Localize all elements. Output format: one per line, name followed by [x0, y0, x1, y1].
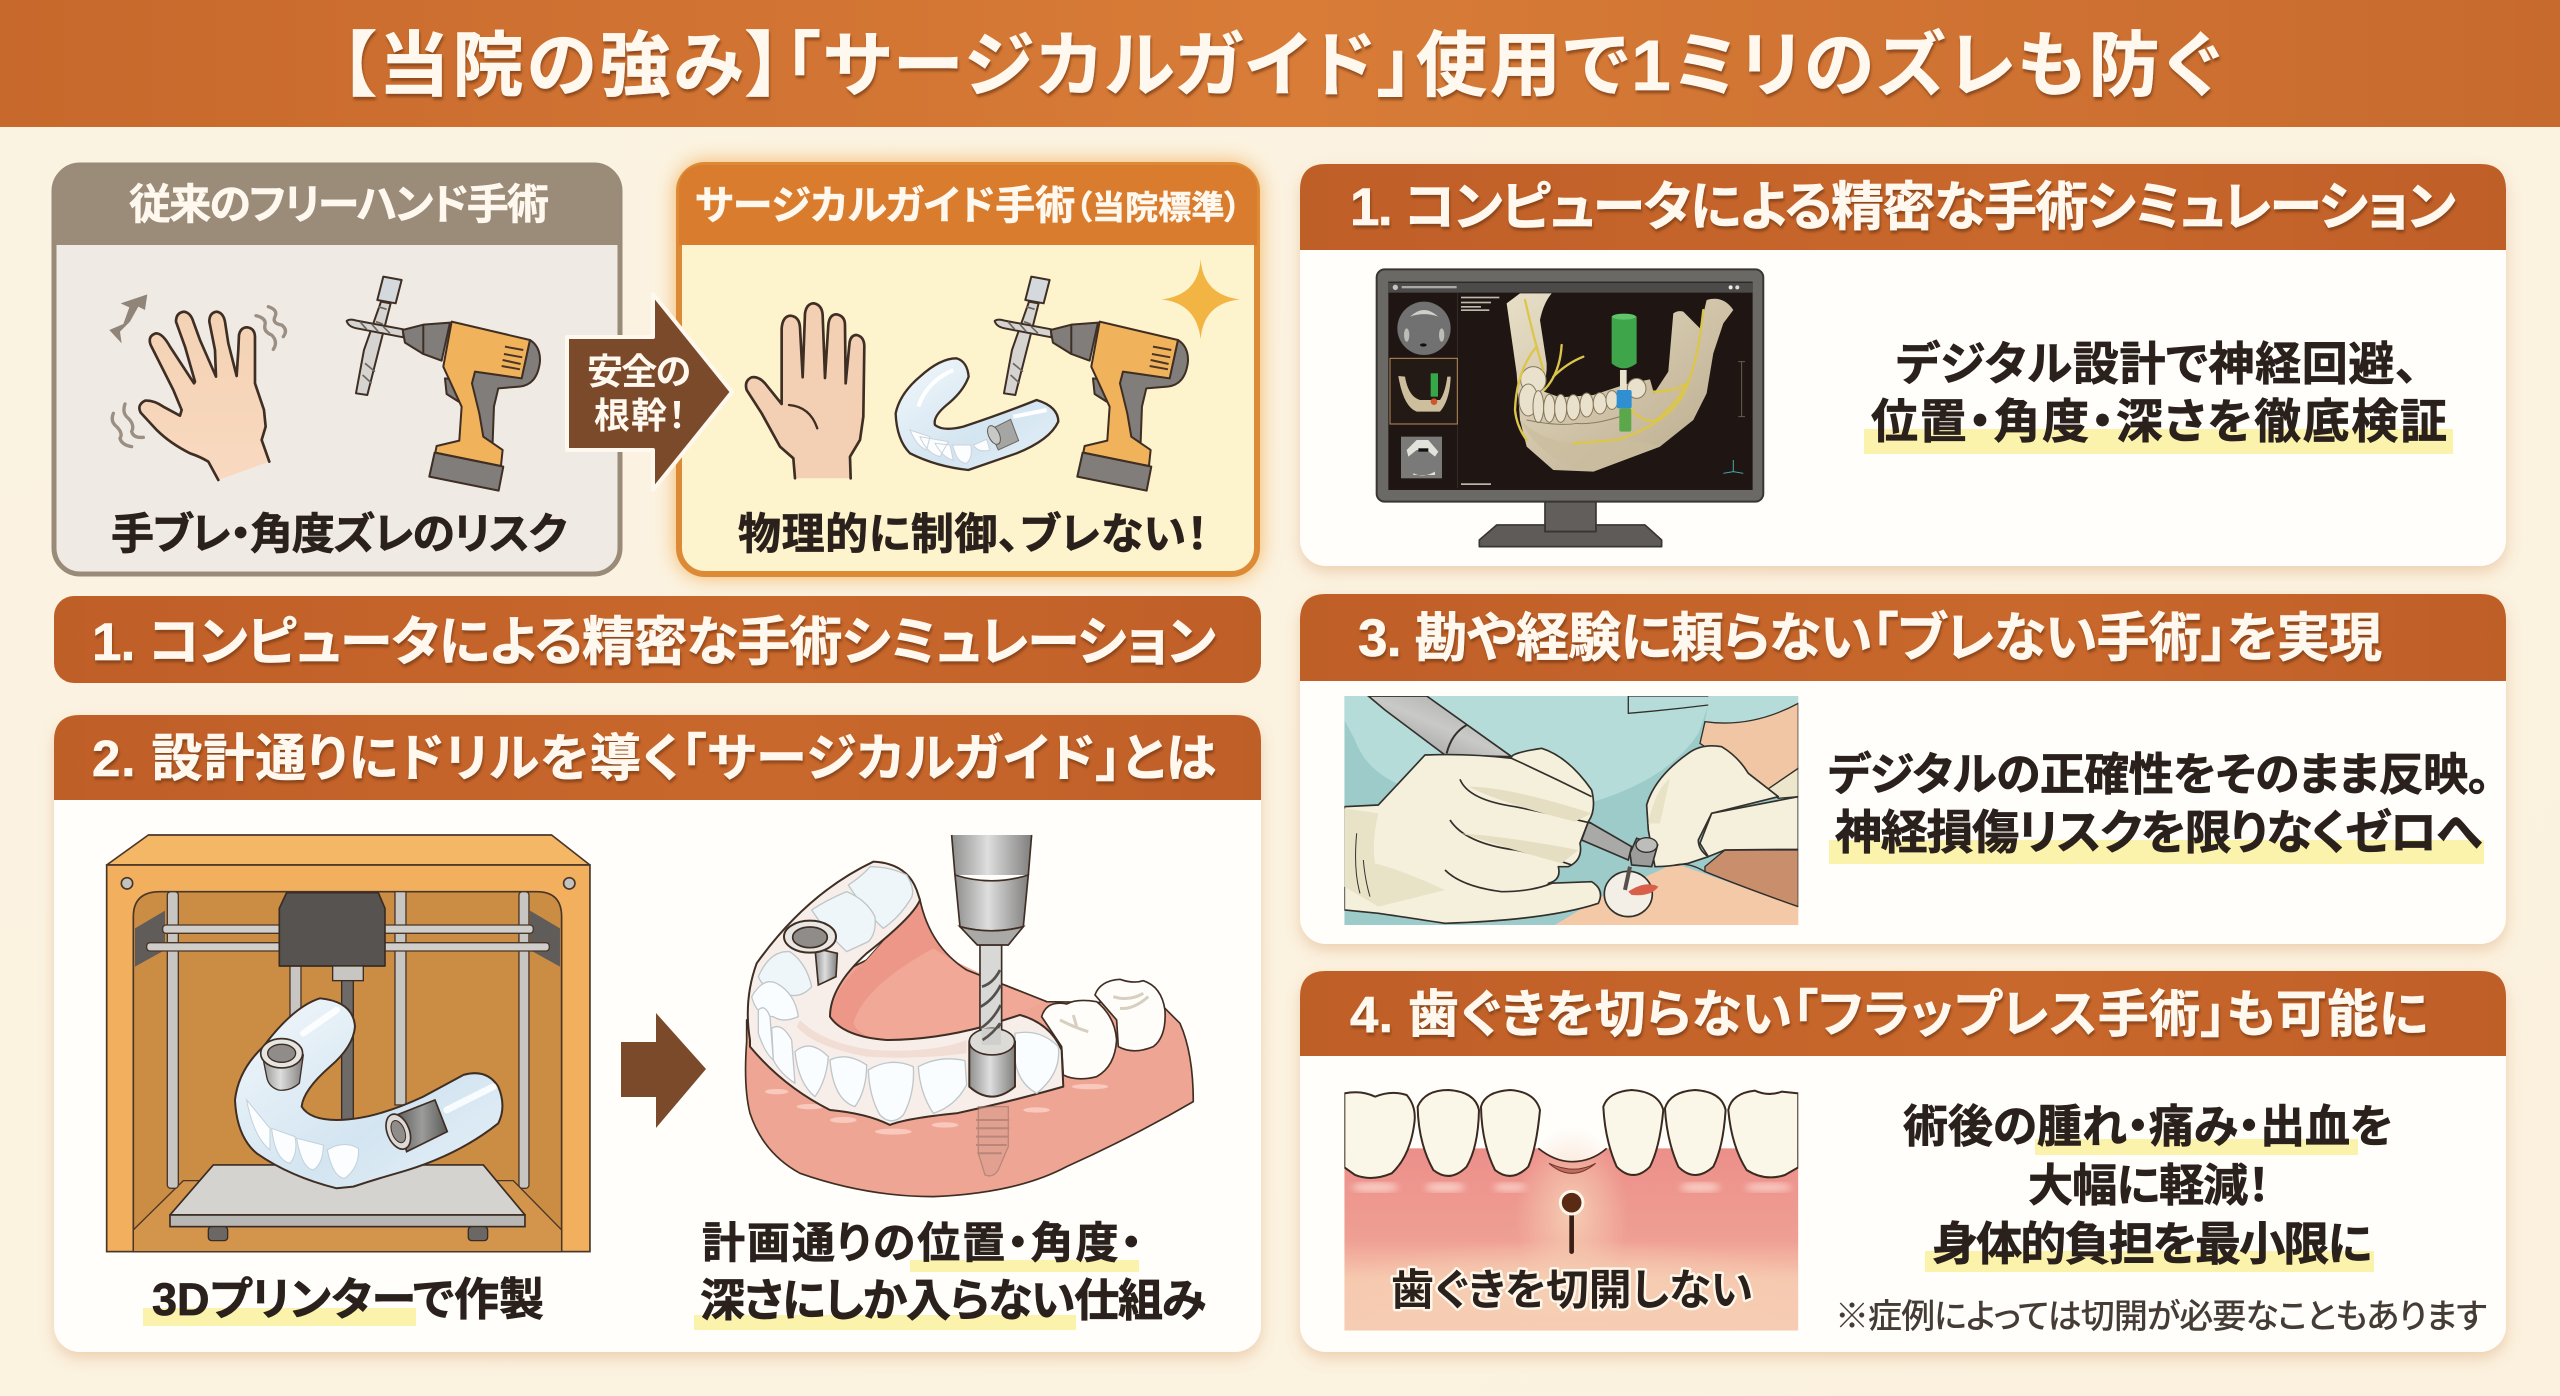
panel header: surgical guide: サージカルガイド手術（当院標準）	[695, 184, 1241, 228]
handpiece	[952, 835, 1032, 875]
guide plate	[748, 862, 1063, 1125]
panel header: simulation	[1300, 164, 2506, 250]
panel header: step 4	[1300, 971, 2506, 1056]
label: precise position, angle, depth	[694, 1220, 1206, 1330]
icon: steady hand	[746, 303, 864, 478]
text: digital design: デジタル設計で神経回避、	[1896, 338, 2418, 390]
panel header: surgical guide	[679, 165, 1257, 245]
panel header: freehand	[54, 165, 620, 245]
panel header: step 3	[1300, 594, 2506, 681]
panel header: step 3: 3. 勘や経験に頼らない「ブレない手術」を実現	[1358, 609, 2382, 668]
drill shaft	[980, 945, 1002, 1048]
icon: monitor with jaw simulation	[1377, 269, 1763, 547]
arrow: printer to mouth	[621, 1013, 706, 1128]
arrow: foundation of safety: 根幹！	[594, 395, 686, 436]
label: physically controlled: 物理的に制御、ブレない！	[738, 511, 1208, 559]
arrow: foundation of safety	[567, 294, 732, 490]
icon: sparkle	[1162, 259, 1240, 339]
text: digital design	[1864, 338, 2453, 454]
panel header: step 2: 2. 設計通りにドリルを導く「サージカルガイド」とは	[92, 730, 1216, 787]
panel header: simulation: 1. コンピュータによる精密な手術シミュレーション	[1350, 178, 2456, 237]
panel: step 3 no-shake surgery	[1300, 594, 2506, 944]
panel: step 4 flapless surgery	[1300, 971, 2506, 1353]
text: digital accuracy: デジタルの正確性をそのまま反映。	[1828, 749, 2490, 800]
panel header: step 2	[54, 715, 1261, 800]
icon: drill	[995, 277, 1188, 491]
panel: conventional freehand surgery	[54, 165, 620, 574]
icon: clear surgical guide	[896, 358, 1058, 470]
label: precise position, angle, depth: 計画通りの位置・角度・	[702, 1220, 1142, 1268]
title banner	[0, 0, 2560, 127]
section bar: step 1 (left): 1. コンピュータによる精密な手術シミュレーション	[92, 613, 1216, 672]
panel header: step 4: 4. 歯ぐきを切らない「フラップレス手術」も可能に	[1350, 986, 2428, 1043]
text: digital design: 位置・角度・深さを徹底検証	[1871, 395, 2447, 448]
panel header: freehand: 従来のフリーハンド手術	[129, 181, 549, 228]
panel: step 2 surgical guide	[54, 715, 1261, 1352]
section bar: step 1 (left)	[54, 596, 1261, 683]
panel: surgical guide surgery	[679, 165, 1257, 574]
text: reduced swelling and pain: 術後の腫れ・痛み・出血を	[1903, 1101, 2393, 1152]
text: digital accuracy: 神経損傷リスクを限りなくゼロへ	[1835, 806, 2482, 859]
icon: shaking hand	[109, 294, 285, 480]
note: exceptions: ※症例によっては切開が必要なこともあります	[1835, 1298, 2487, 1336]
guide teeth	[758, 867, 913, 996]
icon: drill	[347, 277, 540, 491]
text: reduced swelling and pain	[1903, 1101, 2393, 1272]
label: freehand risk: 手ブレ・角度ズレのリスク	[111, 511, 567, 559]
panel: step 1 simulation (right)	[1300, 164, 2506, 566]
text: reduced swelling and pain: 身体的負担を最小限に	[1932, 1218, 2372, 1270]
icon: guide on dental arch with drill	[746, 835, 1193, 1197]
molars right	[1042, 979, 1165, 1079]
label: precise position, angle, depth: 深さにしか入らない仕組み	[700, 1275, 1206, 1326]
label: no gum incision: 歯ぐきを切開しない	[1391, 1267, 1753, 1315]
arrow: foundation of safety: 安全の	[587, 351, 691, 392]
label: made with 3D printer: 3Dプリンターで作製	[152, 1274, 544, 1325]
title banner: 【当院の強み】「サージカルガイド」使用で1ミリのズレも防ぐ	[340, 27, 2220, 106]
icon: 3D printer	[107, 835, 590, 1252]
left sleeve	[815, 948, 837, 985]
text: digital accuracy	[1828, 749, 2490, 864]
text: reduced swelling and pain: 大幅に軽減！	[2028, 1160, 2270, 1211]
main sleeve	[969, 1042, 1015, 1097]
implant	[976, 1107, 1009, 1176]
icon: teeth and gums with no incision	[1344, 1089, 1798, 1331]
printed guide	[235, 998, 502, 1188]
icon: gloved hands with handpiece	[1344, 696, 1798, 925]
